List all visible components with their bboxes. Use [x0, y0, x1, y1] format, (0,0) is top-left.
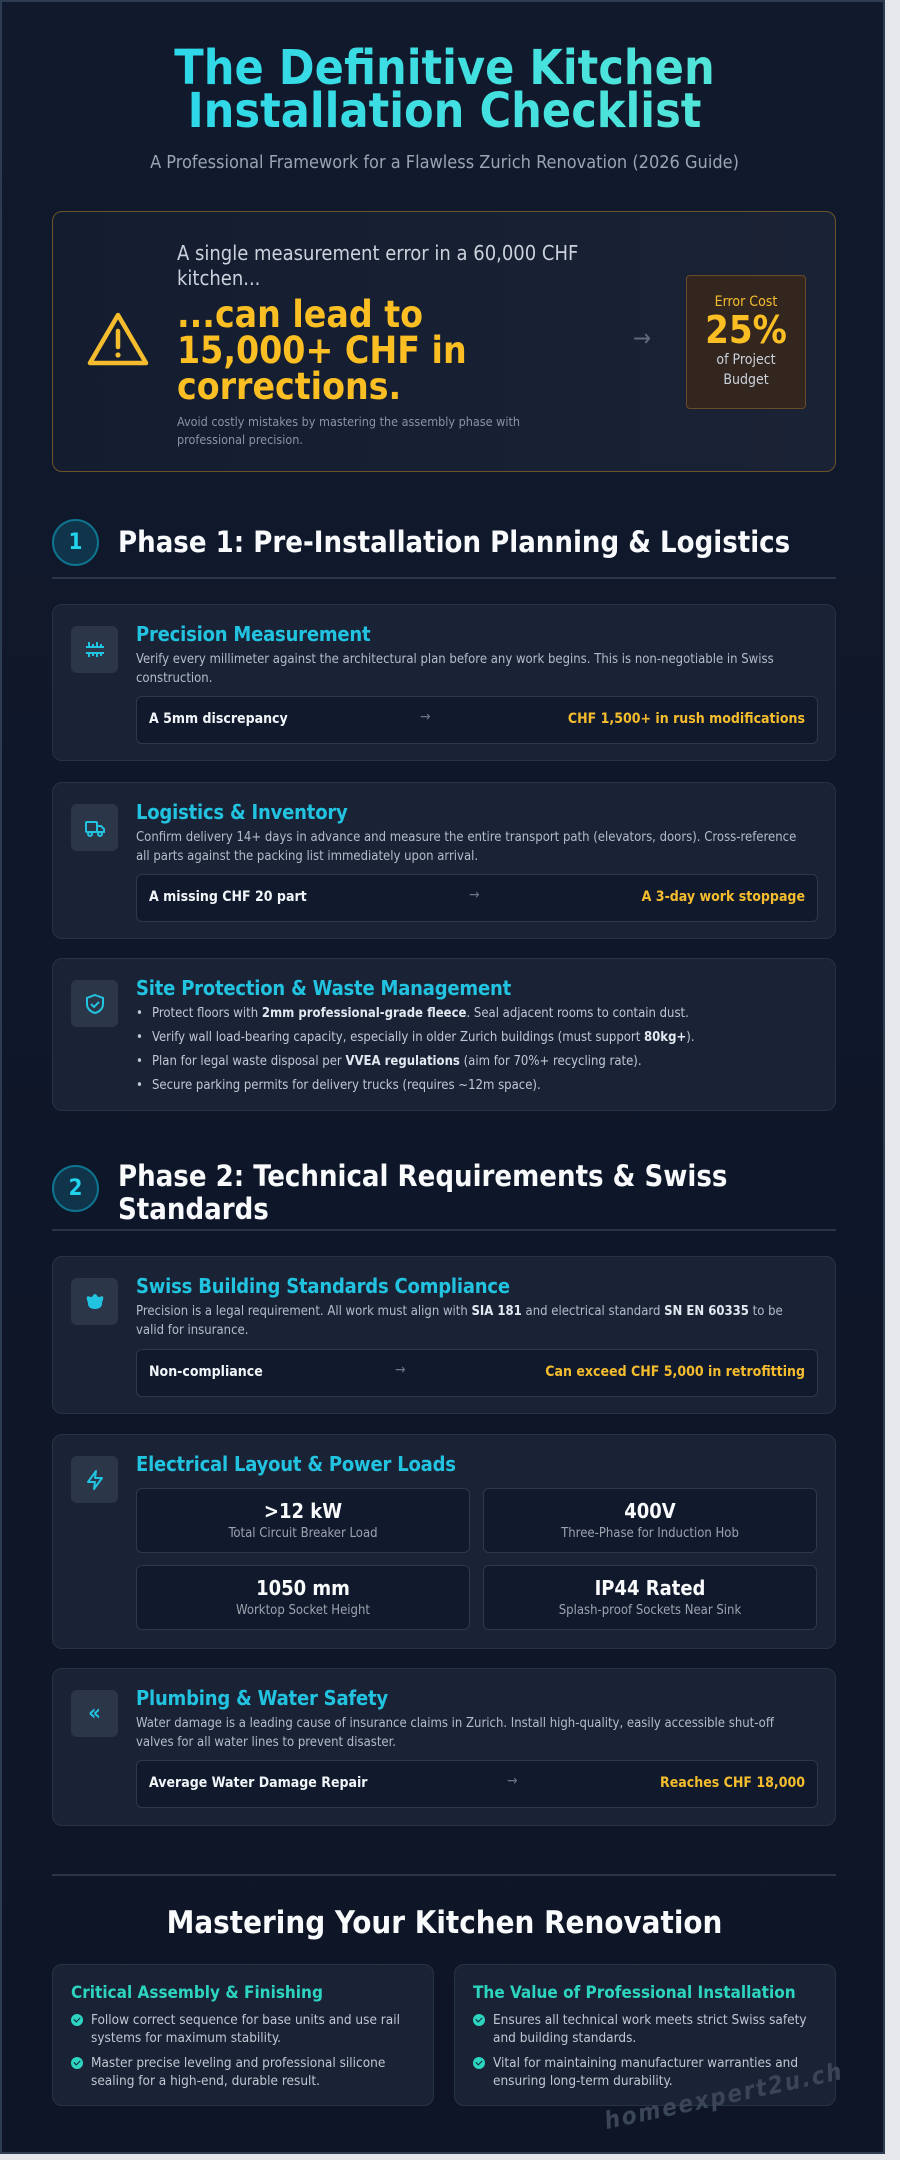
card: swiss standards: Precision is a legal requirement. All work must align with SIA 181 and electrical standard SN EN 60335 to be valid for insurance.: [136, 1304, 783, 1338]
card: plumbing: Plumbing & Water Safety: [136, 1686, 388, 1710]
card: swiss standards: Swiss Building Standards Compliance: [136, 1274, 510, 1298]
icon: water: [71, 1690, 118, 1737]
summary card: assembly: Master precise leveling and professional silicone sealing for a high-end, durable result.: [91, 2055, 385, 2089]
stat: height: [136, 1565, 470, 1630]
error cost box: Error Cost: [715, 294, 777, 310]
stat: load: [136, 1488, 470, 1553]
phase 2 heading: Phase 2: Technical Requirements & Swiss Standards: [118, 1159, 727, 1226]
error cost box: [686, 275, 806, 409]
alert text: Avoid costly mistakes by mastering the assembly phase with professional precision.: [177, 414, 520, 447]
card: precision measurement: Precision Measurement: [136, 622, 370, 646]
consequence bar: Average Water Damage Repair: [149, 1775, 368, 1791]
card: electrical: [52, 1434, 836, 1649]
icon: bolt: [71, 1456, 118, 1503]
summary card: value: The Value of Professional Installation: [473, 1983, 796, 2003]
card: precision measurement: [52, 604, 836, 761]
bullet list: [138, 1006, 695, 1093]
card: logistics: Logistics & Inventory: [136, 800, 348, 824]
stat: voltage: 400V: [624, 1499, 676, 1523]
phase 1 heading: 1: [69, 530, 82, 555]
stat: load: Total Circuit Breaker Load: [228, 1526, 378, 1541]
consequence bar: [136, 1349, 818, 1397]
consequence bar: [136, 1760, 818, 1808]
summary card: value: Vital for maintaining manufacturer warranties and ensuring long-term durability.: [493, 2055, 798, 2089]
alert panel: [52, 211, 836, 472]
consequence bar: →: [395, 1362, 406, 1378]
summary card: assembly: Follow correct sequence for base units and use rail systems for maximum stability.: [91, 2012, 400, 2046]
consequence bar: Non-compliance: [149, 1364, 263, 1380]
alert text: [177, 241, 578, 447]
bullet list: Verify wall load-bearing capacity, especially in older Zurich buildings (must support 80kg+).: [152, 1030, 695, 1045]
card: precision measurement: Verify every millimeter against the architectural plan before any work begins. This is non-negotiable in Swiss construction.: [136, 652, 774, 686]
summary heading: Mastering Your Kitchen Renovation: [167, 1905, 722, 1941]
consequence bar: Can exceed CHF 5,000 in retrofitting: [545, 1364, 805, 1380]
consequence bar: [136, 696, 818, 744]
icon: warning: [88, 312, 148, 366]
consequence bar: →: [469, 887, 480, 903]
card: electrical: Electrical Layout & Power Loads: [136, 1452, 456, 1476]
watermark: homeexpert2u.ch: [602, 2057, 846, 2135]
card: logistics: Confirm delivery 14+ days in advance and measure the entire transport path (elevators, doors). Cross-reference all parts against the packing list immediately upon arrival.: [136, 830, 796, 864]
summary card: assembly: Critical Assembly & Finishing: [71, 1983, 323, 2003]
consequence bar: →: [507, 1773, 518, 1789]
card: logistics: [52, 782, 836, 939]
stat: height: Worktop Socket Height: [236, 1603, 370, 1618]
card: plumbing: [52, 1668, 836, 1826]
card: site protection: [52, 958, 836, 1111]
consequence bar: →: [420, 709, 431, 725]
stat: IP44: IP44 Rated: [595, 1576, 705, 1600]
subtitle: A Professional Framework for a Flawless Zurich Renovation (2026 Guide): [150, 152, 739, 173]
arrow: →: [633, 324, 651, 352]
stat: height: 1050 mm: [256, 1576, 350, 1600]
title: Installation Checklist: [188, 83, 701, 139]
icon: badge: [71, 1278, 118, 1325]
error cost box: Budget: [723, 372, 769, 388]
consequence bar: A missing CHF 20 part: [149, 889, 307, 905]
card: plumbing: Water damage is a leading cause of insurance claims in Zurich. Install high-quality, easily accessible shut-off valves for all water lines to prevent disaster.: [136, 1716, 774, 1750]
card: swiss standards: [52, 1256, 836, 1414]
consequence bar: A 5mm discrepancy: [149, 711, 288, 727]
error cost box: 25%: [705, 308, 787, 352]
stat: IP44: [483, 1565, 817, 1630]
stat: voltage: [483, 1488, 817, 1553]
icon: water: «: [88, 1701, 101, 1726]
bullet list: Secure parking permits for delivery trucks (requires ~12m space).: [152, 1078, 541, 1093]
title: The Definitive Kitchen: [174, 40, 715, 96]
alert text: A single measurement error in a 60,000 CHF kitchen...: [177, 241, 578, 290]
icon: truck: [71, 804, 118, 851]
stat: IP44: Splash-proof Sockets Near Sink: [559, 1603, 741, 1618]
summary card: assembly: [52, 1964, 434, 2106]
stat: voltage: Three-Phase for Induction Hob: [561, 1526, 739, 1541]
icon: ruler: [71, 626, 118, 673]
summary card: value: Ensures all technical work meets strict Swiss safety and building standards.: [493, 2012, 807, 2046]
phase 1 heading: Phase 1: Pre-Installation Planning & Logistics: [118, 525, 790, 559]
error cost box: of Project: [716, 352, 776, 368]
bullet list: Protect floors with 2mm professional-grade fleece. Seal adjacent rooms to contain dust.: [152, 1006, 689, 1021]
consequence bar: CHF 1,500+ in rush modifications: [568, 711, 805, 727]
phase 2 heading: 2: [69, 1176, 82, 1201]
title: [2, 47, 887, 133]
icon: shield: [71, 980, 118, 1027]
stat: load: >12 kW: [264, 1499, 342, 1523]
bullet list: Plan for legal waste disposal per VVEA regulations (aim for 70%+ recycling rate).: [152, 1054, 642, 1069]
consequence bar: Reaches CHF 18,000: [660, 1775, 805, 1791]
card: site protection: Site Protection & Waste Management: [136, 976, 511, 1000]
phase 1 heading: [52, 519, 790, 566]
summary card: value: [454, 1964, 836, 2106]
consequence bar: [136, 874, 818, 922]
consequence bar: A 3-day work stoppage: [642, 889, 805, 905]
alert text: ...can lead to 15,000+ CHF in corrections.: [177, 293, 467, 408]
